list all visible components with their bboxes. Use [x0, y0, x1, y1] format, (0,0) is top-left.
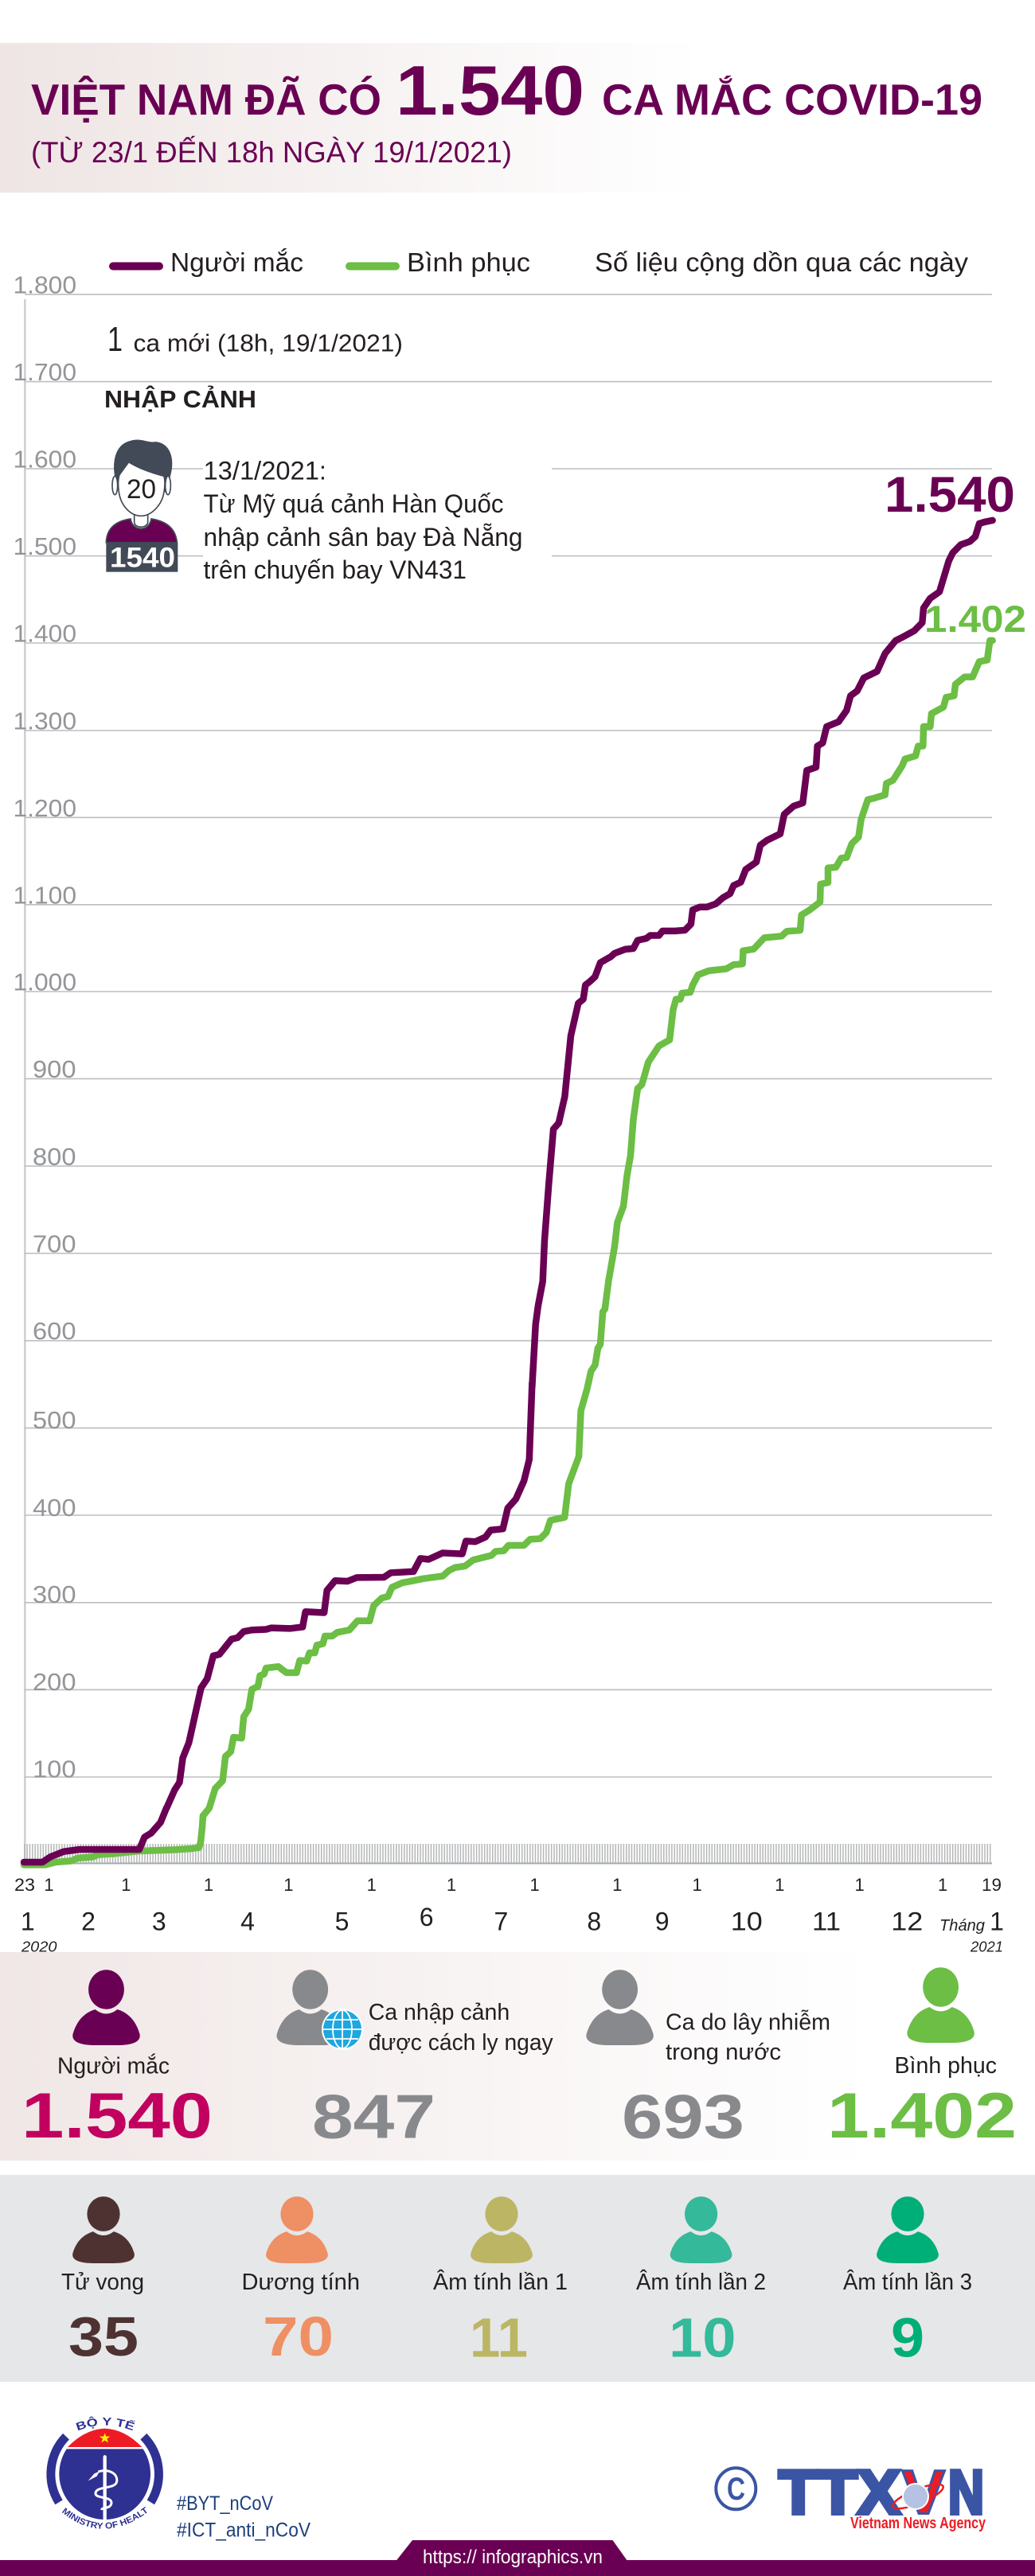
- stat: negative once: 11: [470, 2306, 528, 2368]
- logo: TTXVN: TTX: [779, 2457, 900, 2527]
- x axis day labels: 1: [612, 1875, 622, 1895]
- x axis month labels: Tháng: [939, 1917, 985, 1935]
- y axis labels: 900: [33, 1055, 76, 1083]
- stat: negative once: Âm tính lần 1: [433, 2269, 568, 2295]
- patient icon: [106, 440, 178, 573]
- x axis month labels: 1: [990, 1907, 1004, 1935]
- logo: TTXVN: Vietnam News Agency: [850, 2515, 986, 2532]
- website url: https:// infographics.vn: [423, 2547, 603, 2568]
- label: recovered total: 1.402: [924, 598, 1026, 640]
- title: 1.540: [396, 51, 584, 130]
- new case note: 1: [107, 320, 123, 359]
- panel: patient status: [0, 2175, 1035, 2382]
- x axis month labels: 1: [21, 1907, 35, 1935]
- y axis labels: 1.600: [13, 446, 76, 473]
- patient text: nhập cảnh sân bay Đà Nẵng: [204, 523, 522, 551]
- stat: domestic: Ca do lây nhiễm: [666, 2009, 830, 2036]
- hashtags: [177, 2492, 310, 2542]
- patient text: Từ Mỹ quá cảnh Hàn Quốc: [204, 489, 503, 518]
- new case note: [107, 320, 403, 359]
- stat: recovered: 1.402: [827, 2080, 1017, 2152]
- x axis day labels: 1: [367, 1875, 377, 1895]
- y axis labels: 1.400: [13, 619, 76, 648]
- logo: TTXVN: V: [902, 2457, 945, 2527]
- stat: imported: được cách ly ngay: [369, 2030, 553, 2056]
- y axis labels: 800: [33, 1143, 76, 1171]
- stat: positive: 70: [263, 2305, 334, 2368]
- x axis day labels: 1: [854, 1875, 865, 1895]
- line: cases: [24, 520, 993, 1862]
- x axis day labels: 1: [529, 1875, 540, 1895]
- stat: negative three times: [843, 2196, 972, 2368]
- legend: Số liệu cộng dồn qua các ngày: [595, 247, 969, 277]
- stat: negative twice: [636, 2196, 766, 2368]
- stat: positive: [242, 2196, 360, 2368]
- title: VIỆT NAM ĐÃ CÓ: [31, 75, 381, 124]
- legend: Bình phục: [407, 247, 530, 277]
- line chart: [13, 271, 1026, 1954]
- subtitle: (TỪ 23/1 ĐẾN 18h NGÀY 19/1/2021): [31, 136, 512, 169]
- stat: cases: Người mắc: [57, 2053, 170, 2079]
- x axis day labels: 23: [14, 1875, 35, 1895]
- patient text: trên chuyến bay VN431: [204, 555, 467, 584]
- header band: [0, 43, 982, 193]
- legend: Người mắc: [170, 247, 303, 277]
- x axis month labels: 8: [587, 1907, 601, 1935]
- logo: TTXVN: N: [948, 2457, 984, 2527]
- stat: cases: 1.540: [21, 2080, 213, 2152]
- x axis month labels: 4: [240, 1907, 255, 1935]
- y axis labels: 600: [33, 1317, 76, 1345]
- panel: totals: [0, 1952, 1017, 2161]
- logo: TTXVN: [716, 2457, 986, 2532]
- heading: imported: NHẬP CẢNH: [104, 384, 256, 413]
- line: recovered: [24, 641, 993, 1865]
- stat: negative twice: 10: [669, 2306, 736, 2368]
- x axis month labels: 6: [420, 1903, 434, 1931]
- x axis month labels: 2021: [970, 1939, 1003, 1954]
- y axis labels: 200: [33, 1668, 76, 1696]
- stat: positive: Dương tính: [242, 2270, 360, 2295]
- stat: recovered: Bình phục: [895, 2053, 997, 2079]
- x axis day labels: 1: [204, 1875, 213, 1895]
- title: CA MẮC COVID-19: [602, 75, 982, 124]
- y axis labels: 1.100: [13, 882, 76, 909]
- logo: TTXVN: C: [727, 2472, 745, 2507]
- stat: deaths: Tử vong: [61, 2270, 144, 2295]
- y axis labels: 700: [33, 1230, 76, 1257]
- x axis ticks: [24, 1844, 992, 1864]
- y axis labels: 1.200: [13, 794, 76, 822]
- patient text: [204, 457, 522, 584]
- y axis labels: 100: [33, 1756, 76, 1783]
- y axis labels: 500: [33, 1406, 76, 1434]
- y axis labels: 300: [33, 1580, 76, 1608]
- x axis day labels: 1: [44, 1875, 54, 1895]
- x axis month labels: 2020: [21, 1939, 57, 1954]
- stat: negative three times: Âm tính lần 3: [843, 2269, 972, 2295]
- stat: domestic: trong nước: [666, 2040, 781, 2065]
- patient icon: 1540: [110, 543, 175, 573]
- x axis day labels: 1: [283, 1875, 294, 1895]
- x axis day labels: 1: [447, 1875, 456, 1895]
- x axis day labels: 1: [692, 1875, 702, 1895]
- x axis month labels: 7: [494, 1907, 508, 1935]
- x axis month labels: 5: [335, 1907, 349, 1935]
- logo: ministry of health: MINISTRY OF HEALTH: [62, 2507, 146, 2529]
- logo: ministry of health: BỘ Y TẾ: [76, 2416, 135, 2430]
- y axis labels: [13, 271, 76, 1783]
- stat: deaths: [61, 2196, 144, 2368]
- x axis month labels: [21, 1903, 1004, 1954]
- x axis month labels: 3: [152, 1907, 166, 1935]
- stat: cases: [21, 1970, 213, 2152]
- new case note: ca mới (18h, 19/1/2021): [134, 329, 403, 357]
- y axis labels: 1.000: [13, 968, 76, 996]
- x axis month labels: 9: [655, 1907, 670, 1935]
- legend: [109, 247, 969, 277]
- y axis labels: 400: [33, 1494, 76, 1522]
- logo: ministry of health: [46, 2416, 163, 2529]
- footer bar: [0, 2540, 1035, 2576]
- x axis day labels: [14, 1875, 1002, 1895]
- x axis month labels: 12: [891, 1907, 923, 1935]
- x axis day labels: 1: [938, 1875, 947, 1895]
- stat: imported: Ca nhập cảnh: [369, 2000, 510, 2025]
- y axis labels: 1.300: [13, 707, 76, 735]
- stat: imported: 847: [312, 2082, 435, 2152]
- patient icon: 20: [127, 474, 156, 505]
- x axis day labels: 1: [121, 1875, 131, 1895]
- y axis labels: 1.500: [13, 532, 76, 560]
- stat: negative three times: 9: [891, 2306, 924, 2368]
- stat: imported: [276, 1970, 553, 2152]
- stat: recovered: [827, 1967, 1017, 2152]
- label: cases total: 1.540: [885, 467, 1015, 523]
- patient text: 13/1/2021:: [204, 457, 326, 485]
- hashtags: #ICT_anti_nCoV: [177, 2519, 310, 2542]
- icon: globe: [322, 2009, 363, 2050]
- stat: negative twice: Âm tính lần 2: [636, 2269, 766, 2295]
- stat: domestic: 693: [622, 2082, 744, 2152]
- y axis labels: 1.700: [13, 358, 76, 386]
- x axis day labels: 19: [982, 1875, 1002, 1895]
- x axis day labels: 1: [775, 1875, 784, 1895]
- stat: negative once: [433, 2196, 568, 2368]
- x axis month labels: 10: [731, 1907, 763, 1935]
- hashtags: #BYT_nCoV: [177, 2492, 273, 2515]
- stat: deaths: 35: [68, 2305, 139, 2368]
- x axis month labels: 11: [812, 1907, 841, 1935]
- y axis labels: 1.800: [13, 271, 76, 299]
- x axis month labels: 2: [81, 1907, 96, 1935]
- stat: domestic: [586, 1970, 830, 2152]
